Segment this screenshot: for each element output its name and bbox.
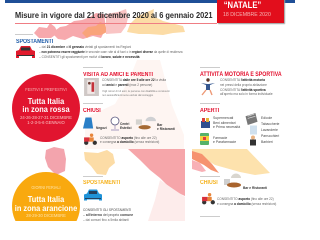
section: spostamenti rossa — [15, 34, 182, 59]
circle: zona arancione — [12, 172, 80, 240]
icon: newspapers — [246, 113, 258, 125]
red decree badge: 18 DICEMBRE 2020 — [223, 12, 271, 18]
text: consentiti: CONSENTITI GLI SPOSTAMENTI — [83, 208, 131, 212]
icon: shopping bag — [83, 118, 94, 128]
heading: spostamenti: SPOSTAMENTI — [16, 38, 53, 44]
panel: chiusi rossa — [83, 103, 175, 145]
circle: zona rossa: in zona rossa — [22, 104, 70, 114]
icon: delivery scooter — [84, 134, 97, 145]
heading: chiusi arancione: CHIUSI — [200, 180, 218, 186]
panel: spostamenti arancione: – all'interno del proprio comune — [83, 213, 133, 217]
panel: attivita motoria e sportiva: all'aperto ma solo in forma individuale — [220, 92, 273, 96]
panel: attivita motoria e sportiva — [200, 67, 282, 96]
text: asporto: CONSENTITO asporto (fino alle ore 22) — [100, 136, 157, 140]
panel: visita ad amici e parenti: ad amici e parenti (max 2 persone) — [102, 83, 152, 87]
icon: barber and shirt — [250, 126, 257, 146]
heading: spostamenti arancione: SPOSTAMENTI — [83, 180, 120, 186]
circle: zona rossa: FESTIVI E PREFESTIVI — [25, 86, 67, 92]
panel: visita ad amici e parenti — [83, 67, 170, 96]
circle: zona rossa — [12, 74, 80, 142]
text: bar e ristoranti: Bar — [157, 122, 162, 126]
circle: zona rossa: Tutta Italia — [28, 96, 64, 106]
panel: aperti: Tabaccherie — [260, 122, 279, 126]
panel: chiusi rossa: e consegna a domicilio (senza restrizioni) — [100, 140, 159, 144]
icon: red car — [16, 46, 35, 58]
section: spostamenti rossa: – CONSENTITI gli spostamenti per motivi di lavoro, salute e necessità — [39, 55, 140, 59]
panel: attivita motoria e sportiva: CONSENTITA l'attività sportiva — [220, 88, 266, 92]
text: bar e ristoranti: e Ristoranti — [157, 126, 175, 130]
panel: aperti: Parrucchieri — [260, 134, 279, 138]
panel: aperti: Beni alimentari — [213, 121, 236, 125]
panel: aperti: e Parafarmacie — [213, 140, 236, 144]
title: Misure in vigore dal 21 dicembre 2020 al 6 gennaio 2021 — [15, 10, 213, 20]
heading: visita: VISITA AD AMICI E PARENTI — [83, 72, 153, 78]
panel: spostamenti arancione — [83, 176, 133, 221]
icon: mirror — [110, 116, 120, 130]
panel: chiusi arancione: e consegna a domicilio (senza restrizioni) — [217, 202, 276, 206]
red decree badge: “NATALE” — [224, 0, 261, 10]
circle: zona arancione: GIORNI FERIALI — [31, 184, 61, 190]
text: supermercati: Supermercati — [213, 116, 233, 120]
icon: door — [84, 78, 99, 96]
circle: zona rossa: 1-2-3-5-6 GENNAIO — [27, 121, 65, 126]
text: asporto arancione: CONSENTITO asporto (fino alle ore 22) — [217, 197, 274, 201]
panel: chiusi arancione — [200, 174, 276, 217]
panel: visita ad amici e parenti: I figli minori di 14 anni, le persone con disabilità e conviventi — [102, 88, 170, 92]
icon: runner — [201, 78, 215, 96]
icon: blue car — [84, 190, 102, 200]
text: bar e ristoranti: Bar e Ristoranti — [243, 186, 267, 190]
heading: aperti: APERTI — [200, 108, 219, 114]
icon: pharmacy — [200, 133, 209, 145]
circle: zona arancione: Tutta Italia — [28, 194, 64, 204]
panel: attivita motoria e sportiva: nei pressi della propria abitazione — [220, 83, 267, 87]
icon: delivery scooter orange — [202, 193, 215, 204]
icon: grocery basket — [201, 118, 210, 128]
icon: cloche and food — [136, 116, 156, 130]
text: centri estetici — [120, 122, 132, 130]
panel: aperti: e Prima necessità — [213, 125, 240, 129]
text: centri estetici: Centri — [120, 122, 129, 126]
red decree badge — [217, 0, 284, 23]
circle: zona rossa: 24-26-28-27-31 DICEMBRE — [20, 116, 72, 120]
heading: chiusi: CHIUSI — [83, 108, 101, 114]
text: rules: – dal 21 dicembre al 6 gennaio vietati gli spostamenti tra Regioni — [39, 45, 131, 49]
section: spostamenti rossa: – non potranno essere raggiunte le seconde case: site al di fuori o in regioni diverse da quelle di residenza — [39, 50, 182, 54]
top header bar — [5, 0, 295, 3]
circle: zona arancione: in zona arancione — [15, 202, 77, 212]
text: bar e ristoranti — [157, 122, 175, 130]
text: farmacie: Farmacie — [213, 136, 227, 140]
text: attivita: CONSENTITA l'attività motoria — [220, 78, 265, 82]
text: open shops list: Edicole — [260, 116, 272, 120]
text: visita: CONSENTITA dalle ore 5 alle ore 22 la visita — [102, 78, 166, 82]
icon: bar and restaurant — [224, 174, 241, 188]
text: negozi: Negozi — [96, 126, 107, 130]
panel: aperti: Lavanderie — [260, 128, 277, 132]
text: centri estetici: Estetici — [120, 126, 132, 130]
panel: aperti — [200, 103, 280, 146]
heading: attivita: ATTIVITÀ MOTORIA E SPORTIVA — [200, 72, 282, 78]
panel: visita ad amici e parenti: non autosufficienti sono esclusi dal conteggio — [102, 92, 153, 96]
circle: zona arancione: 28-29-30 DICEMBRE — [26, 214, 66, 218]
panel: aperti: Barbieri — [260, 140, 272, 144]
